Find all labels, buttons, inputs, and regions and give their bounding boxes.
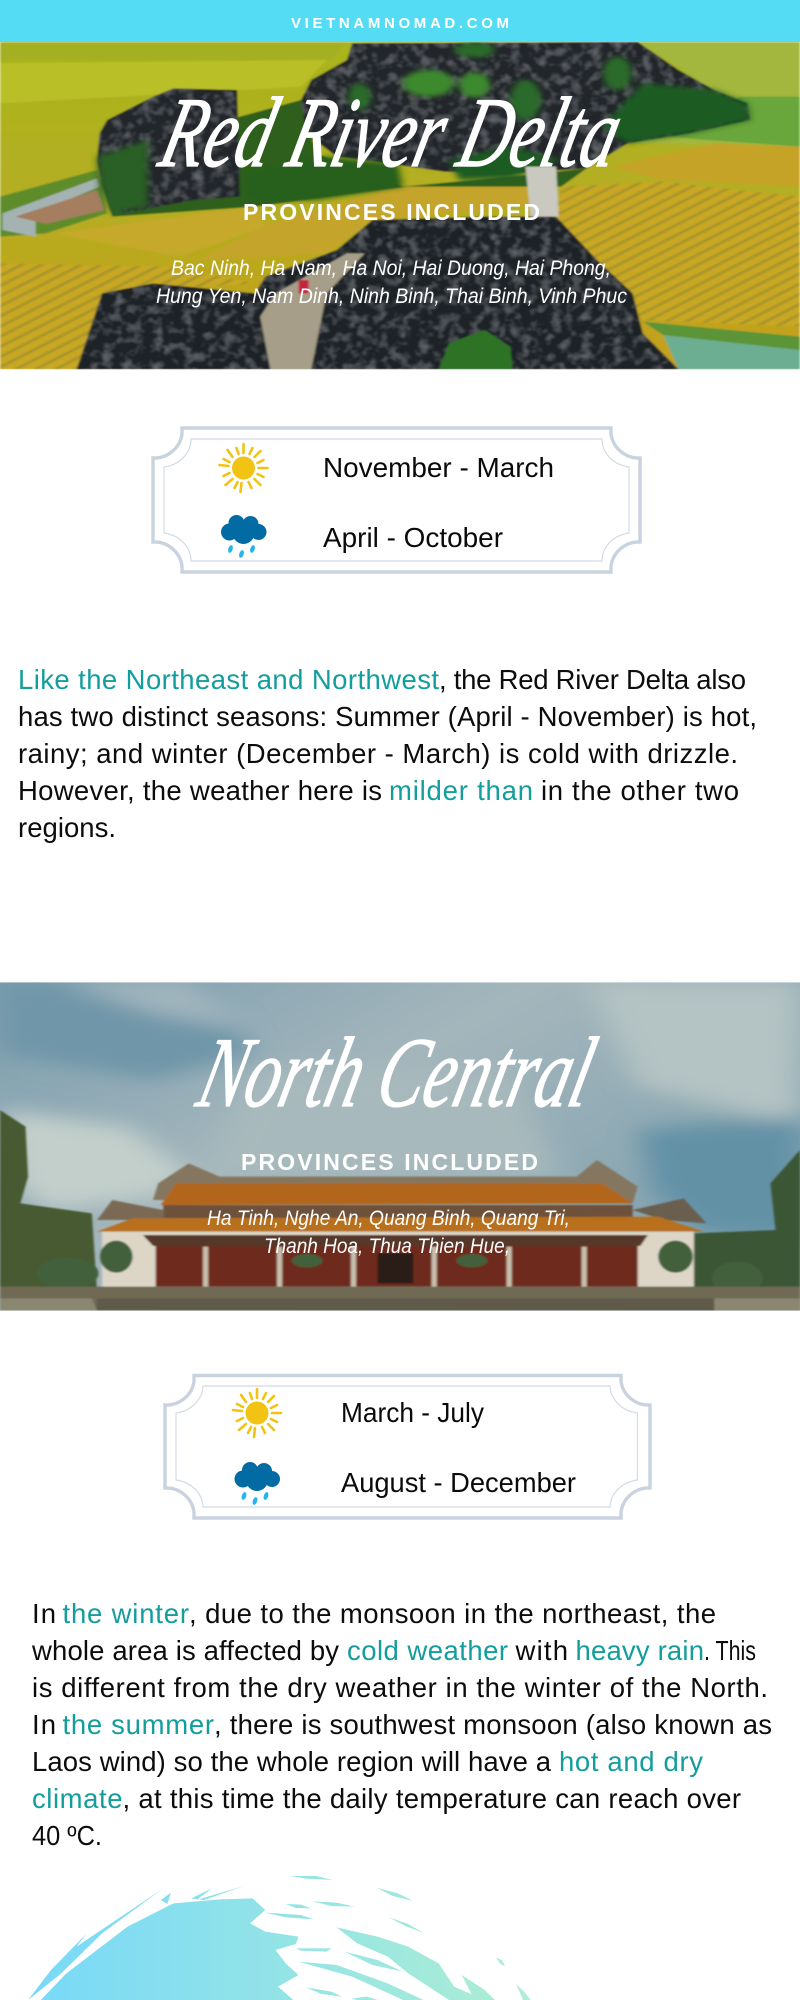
text: province list: Bac Ninh, Ha Nam, Ha Noi, Hai Duong, Hai Phong, (171, 257, 611, 280)
text block: North Central description: , due to the monsoon in the northeast, the (189, 1598, 716, 1629)
text block: North Central description: In (32, 1598, 56, 1629)
text block: North Central description: Laos wind) so the whole region will have a (32, 1746, 552, 1777)
heading: provinces included: PROVINCES INCLUDED (241, 1149, 538, 1175)
text: province list: Hung Yen, Nam Dinh, Ninh Binh, Thai Binh, Vinh Phuc (156, 285, 627, 308)
text: province list (156, 257, 627, 308)
text block: North Central description: . This (704, 1635, 756, 1666)
title: North Central: North Central (188, 1017, 606, 1128)
text block: North Central description: In (32, 1709, 56, 1740)
text: dry season: November - March (323, 452, 554, 483)
heading: provinces included: PROVINCES INCLUDED (243, 199, 540, 225)
photo: imperial palace hall under cloudy sky (0, 982, 800, 1311)
text block: Red River Delta description: However, the weather here is (18, 775, 382, 806)
text block: North Central description: whole area is affected by (31, 1635, 339, 1666)
text block: Red River Delta description: Like the Northeast and Northwest (18, 664, 439, 695)
decorative brush stroke (28, 1876, 531, 2000)
panel: North Central hero (0, 982, 800, 1311)
text: province list: Ha Tinh, Nghe An, Quang Binh, Quang Tri, (207, 1207, 570, 1230)
frame (165, 1376, 650, 1518)
panel: North Central seasons (165, 1376, 650, 1518)
text block: Red River Delta description: regions. (18, 812, 116, 843)
panel: Red River Delta seasons (153, 428, 640, 572)
text block: North Central description: heavy rain (576, 1635, 704, 1666)
text block: North Central description: the summer (62, 1709, 214, 1740)
text block: Red River Delta description (18, 664, 757, 843)
text block: North Central description: , there is southwest monsoon (also known as (214, 1709, 772, 1740)
text block: Red River Delta description: in the other two (541, 775, 739, 806)
text: rainy season: April - October (323, 522, 503, 553)
text block: North Central description: , at this time the daily temperature can reach over (122, 1783, 741, 1814)
text block: Red River Delta description: has two distinct seasons: Summer (April - November) is hot, (18, 701, 757, 732)
text block: North Central description: cold weather (347, 1635, 508, 1666)
photo: limestone karst and rice fields (0, 42, 800, 369)
text: province list (207, 1207, 570, 1258)
text: dry season: March - July (341, 1397, 484, 1428)
icon: sun (233, 1389, 281, 1437)
text block: North Central description: climate (32, 1783, 122, 1814)
icon: rain cloud (221, 515, 266, 558)
text block: North Central description (31, 1598, 772, 1851)
icon: sun (220, 444, 268, 492)
text block: Red River Delta description: milder than (389, 775, 533, 806)
panel: Red River Delta hero (0, 42, 800, 369)
text block: Red River Delta description: rainy; and winter (December - March) is cold with drizzle. (18, 738, 738, 769)
icon: rain cloud (234, 1462, 280, 1505)
text: province list: Thanh Hoa, Thua Thien Hue, (264, 1235, 510, 1258)
text block: North Central description: hot and dry (559, 1746, 703, 1777)
site name: VIETNAMNOMAD.COM (291, 15, 509, 32)
text block: North Central description: is different from the dry weather in the winter of the North. (32, 1672, 768, 1703)
text block: North Central description: 40 ºC. (32, 1820, 102, 1851)
text block: North Central description: with (514, 1635, 568, 1666)
top banner (0, 0, 800, 42)
text block: Red River Delta description: , the Red River Delta also (439, 664, 746, 695)
frame (153, 428, 640, 572)
text: rainy season: August - December (341, 1467, 576, 1498)
text block: North Central description: the winter (62, 1598, 189, 1629)
